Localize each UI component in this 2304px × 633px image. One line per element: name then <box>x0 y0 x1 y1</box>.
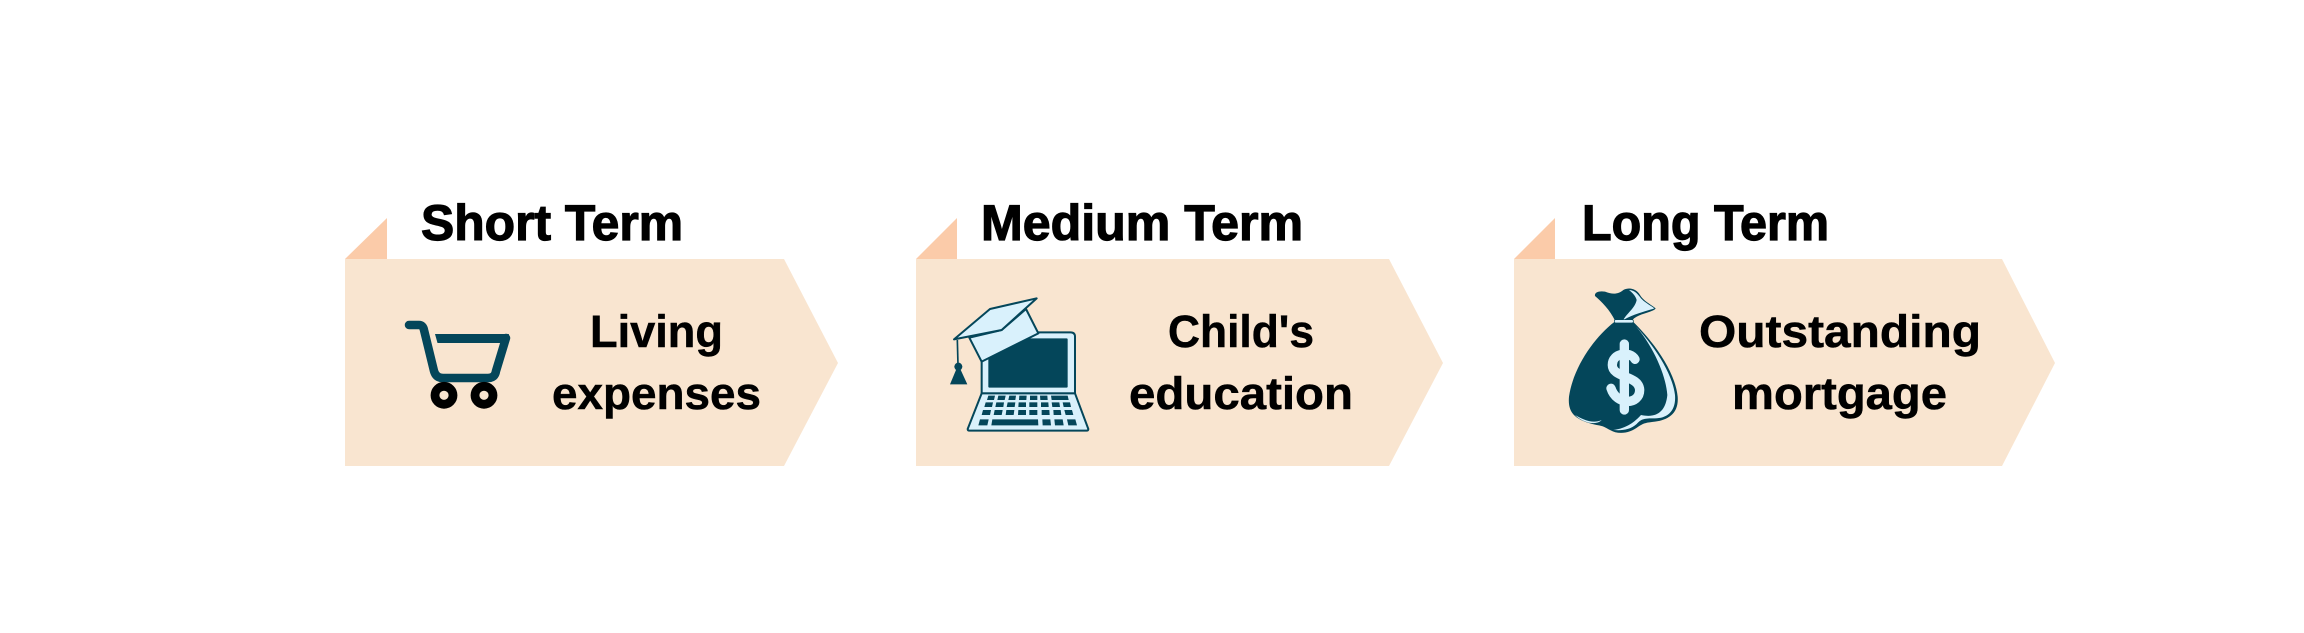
panel: short term <box>345 195 838 466</box>
fold tab: medium term <box>916 218 957 259</box>
text: living expenses: Living <box>590 306 723 357</box>
icon: laptop with graduation cap <box>950 298 1088 431</box>
text: outstanding mortgage: Outstanding <box>1699 306 1981 357</box>
arrow panel: short term <box>345 259 838 466</box>
text: child's education: education <box>1129 368 1353 419</box>
text: living expenses <box>552 306 761 419</box>
arrow panel: long term <box>1514 259 2055 466</box>
panel: long term <box>1514 195 2055 466</box>
heading: short term: Short Term <box>421 195 683 251</box>
panel: medium term <box>916 195 1443 466</box>
fold tab: short term <box>345 218 387 259</box>
text: child's education <box>1129 306 1353 419</box>
text: child's education: Child's <box>1168 306 1314 357</box>
icon: shopping cart <box>409 325 509 404</box>
heading: medium term: Medium Term <box>981 195 1303 251</box>
text: living expenses: expenses <box>552 368 761 419</box>
heading: long term: Long Term <box>1582 195 1829 251</box>
arrow panel: medium term <box>916 259 1443 466</box>
text: outstanding mortgage: mortgage <box>1732 368 1947 419</box>
text: outstanding mortgage <box>1699 306 1981 419</box>
fold tab: long term <box>1514 218 1555 259</box>
icon: money bag <box>1569 289 1678 433</box>
